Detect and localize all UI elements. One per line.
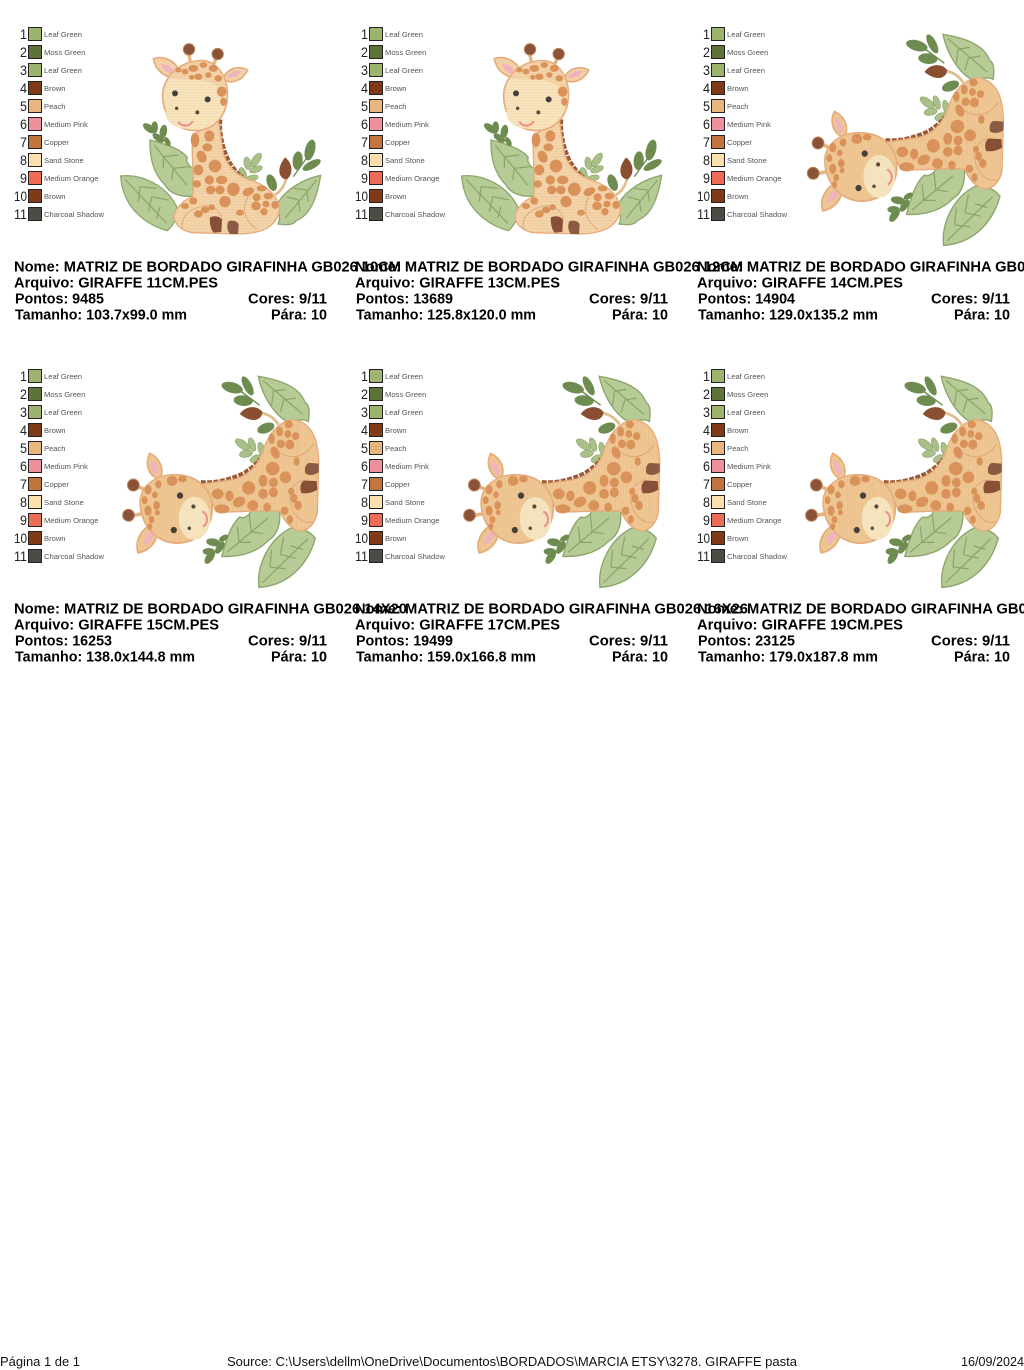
legend: thread colours: 7 xyxy=(20,134,27,150)
legend: thread colours: 2 xyxy=(703,44,710,60)
legend: thread colours: Medium Pink xyxy=(44,462,88,471)
legend: thread colours: 3 xyxy=(20,404,27,420)
illustration: rotated giraffe with leaves xyxy=(806,375,1002,587)
footer: Página 1 de 1 xyxy=(0,1355,80,1369)
text block: design details: Cores: 9/11 xyxy=(589,292,668,308)
text block: design details: Cores: 9/11 xyxy=(931,634,1010,650)
legend: thread colours: 10 xyxy=(14,188,27,204)
legend: thread colours: 1 xyxy=(703,26,710,42)
panel: giraffe design 4 xyxy=(14,368,407,666)
text block: design details: Tamanho: 179.0x187.8 mm xyxy=(698,650,878,666)
legend: thread colours: Peach xyxy=(727,102,749,111)
legend: thread colours: 5 xyxy=(361,440,368,456)
legend: thread colours: Leaf Green xyxy=(44,372,82,381)
legend: thread colours: Copper xyxy=(44,480,69,489)
text block: design details xyxy=(355,260,743,324)
text block: design details: Cores: 9/11 xyxy=(931,292,1010,308)
legend: thread colours: 6 xyxy=(20,116,27,132)
legend: thread colours: Leaf Green xyxy=(727,66,765,75)
text block: design details: Nome: MATRIZ DE BORDADO GIRAFINHA GB026 12CM xyxy=(355,260,743,276)
legend: thread colours: Sand Stone xyxy=(727,498,767,507)
legend: thread colours: 1 xyxy=(361,26,368,42)
legend: thread colours: Leaf Green xyxy=(727,408,765,417)
legend: thread colours: 11 xyxy=(14,548,27,564)
legend: thread colours: 3 xyxy=(703,62,710,78)
legend: thread colours: 8 xyxy=(361,494,368,510)
legend: thread colours: 1 xyxy=(361,368,368,384)
text block: design details: Tamanho: 138.0x144.8 mm xyxy=(15,650,195,666)
legend: thread colours: 9 xyxy=(703,512,710,528)
legend: thread colours: Leaf Green xyxy=(44,30,82,39)
legend: thread colours: Medium Orange xyxy=(385,174,439,183)
legend: thread colours: Charcoal Shadow xyxy=(727,210,787,219)
legend: thread colours xyxy=(355,26,445,222)
legend: thread colours: 10 xyxy=(355,530,368,546)
legend: thread colours: Moss Green xyxy=(727,48,768,57)
legend: thread colours: 4 xyxy=(361,80,368,96)
text block: design details: Cores: 9/11 xyxy=(248,292,327,308)
illustration: sitting giraffe with leaves xyxy=(462,44,663,234)
text block: design details xyxy=(697,260,1024,324)
legend: thread colours: 5 xyxy=(703,440,710,456)
text block: design details: Pontos: 9485 xyxy=(15,292,104,308)
legend: thread colours: Medium Pink xyxy=(385,120,429,129)
legend: thread colours: Brown xyxy=(385,84,407,93)
legend: thread colours: Leaf Green xyxy=(385,372,423,381)
legend: thread colours: 7 xyxy=(703,134,710,150)
legend: thread colours: 6 xyxy=(703,116,710,132)
legend: thread colours: 1 xyxy=(20,368,27,384)
legend: thread colours: Copper xyxy=(727,480,752,489)
legend: thread colours: 9 xyxy=(361,512,368,528)
legend: thread colours: Brown xyxy=(44,426,66,435)
legend: thread colours: Medium Orange xyxy=(727,516,781,525)
legend: thread colours: Charcoal Shadow xyxy=(385,210,445,219)
legend: thread colours: Medium Pink xyxy=(727,462,771,471)
legend: thread colours: 5 xyxy=(361,98,368,114)
legend: thread colours: 5 xyxy=(20,440,27,456)
text block: design details: Tamanho: 129.0x135.2 mm xyxy=(698,308,878,324)
legend: thread colours: Leaf Green xyxy=(385,30,423,39)
legend: thread colours: 6 xyxy=(361,458,368,474)
legend: thread colours: Sand Stone xyxy=(44,498,84,507)
legend: thread colours: Leaf Green xyxy=(727,372,765,381)
legend: thread colours: Charcoal Shadow xyxy=(44,210,104,219)
text block: design details: Arquivo: GIRAFFE 14CM.PES xyxy=(697,276,903,292)
legend: thread colours: Brown xyxy=(385,192,407,201)
footer: 16/09/2024 xyxy=(961,1355,1024,1369)
legend: thread colours: 9 xyxy=(20,512,27,528)
legend: thread colours: 10 xyxy=(14,530,27,546)
legend: thread colours xyxy=(14,368,104,564)
legend: thread colours xyxy=(697,368,787,564)
illustration: sitting giraffe with leaves xyxy=(121,44,322,234)
panel: giraffe design 3 xyxy=(697,26,1024,324)
panel: giraffe design 1 xyxy=(14,26,401,324)
text block: design details: Nome: MATRIZ DE BORDADO GIRAFINHA GB026 14X20 xyxy=(14,602,407,618)
legend: thread colours: Charcoal Shadow xyxy=(44,552,104,561)
legend: thread colours: Medium Pink xyxy=(44,120,88,129)
legend: thread colours: 11 xyxy=(697,206,710,222)
legend: thread colours: 3 xyxy=(361,62,368,78)
legend: thread colours: 2 xyxy=(703,386,710,402)
legend: thread colours: Peach xyxy=(44,102,66,111)
illustration: rotated giraffe with leaves xyxy=(464,375,660,587)
legend: thread colours: Copper xyxy=(44,138,69,147)
legend: thread colours: 8 xyxy=(20,494,27,510)
legend: thread colours: Brown xyxy=(44,84,66,93)
text block: design details: Cores: 9/11 xyxy=(589,634,668,650)
legend: thread colours: 11 xyxy=(697,548,710,564)
panel: giraffe design 6 xyxy=(697,368,1024,666)
panel: giraffe design 2 xyxy=(355,26,743,324)
legend: thread colours: Brown xyxy=(385,534,407,543)
legend: thread colours: Sand Stone xyxy=(44,156,84,165)
legend: thread colours: Medium Pink xyxy=(385,462,429,471)
legend: thread colours: 5 xyxy=(703,98,710,114)
legend: thread colours: 11 xyxy=(355,548,368,564)
text block: design details xyxy=(14,602,407,666)
text block: design details: Nome: MATRIZ DE BORDADO GIRAFINHA GB026 10CM xyxy=(14,260,401,276)
legend: thread colours: Moss Green xyxy=(385,390,426,399)
legend: thread colours: Moss Green xyxy=(385,48,426,57)
legend: thread colours: 4 xyxy=(703,80,710,96)
legend: thread colours: Sand Stone xyxy=(385,156,425,165)
legend: thread colours: 7 xyxy=(361,134,368,150)
legend: thread colours: Brown xyxy=(727,534,749,543)
legend: thread colours: 3 xyxy=(20,62,27,78)
legend: thread colours: 10 xyxy=(697,530,710,546)
legend: thread colours: 8 xyxy=(703,152,710,168)
legend: thread colours: 6 xyxy=(20,458,27,474)
legend: thread colours: Brown xyxy=(727,192,749,201)
legend: thread colours: 4 xyxy=(20,80,27,96)
illustration: rotated giraffe with leaves xyxy=(807,33,1003,245)
illustration: rotated giraffe with leaves xyxy=(123,375,319,587)
legend: thread colours: 2 xyxy=(361,44,368,60)
legend: thread colours: 2 xyxy=(361,386,368,402)
legend: thread colours: Brown xyxy=(385,426,407,435)
legend: thread colours xyxy=(14,26,104,222)
legend: thread colours: Leaf Green xyxy=(44,408,82,417)
legend: thread colours: Peach xyxy=(44,444,66,453)
text block: design details: Pontos: 14904 xyxy=(698,292,795,308)
legend: thread colours: 8 xyxy=(361,152,368,168)
legend: thread colours: 1 xyxy=(20,26,27,42)
legend: thread colours: Copper xyxy=(385,480,410,489)
text block: design details: Arquivo: GIRAFFE 17CM.PES xyxy=(355,618,560,634)
text block: design details: Pontos: 16253 xyxy=(15,634,112,650)
legend: thread colours: 4 xyxy=(361,422,368,438)
legend: thread colours xyxy=(697,26,787,222)
legend: thread colours: Copper xyxy=(727,138,752,147)
legend: thread colours xyxy=(355,368,445,564)
legend: thread colours: Medium Orange xyxy=(385,516,439,525)
legend: thread colours: 7 xyxy=(20,476,27,492)
legend: thread colours: Charcoal Shadow xyxy=(385,552,445,561)
legend: thread colours: 9 xyxy=(20,170,27,186)
legend: thread colours: 1 xyxy=(703,368,710,384)
text block: design details: Pontos: 13689 xyxy=(356,292,453,308)
text block: design details: Tamanho: 103.7x99.0 mm xyxy=(15,308,187,324)
legend: thread colours: 3 xyxy=(703,404,710,420)
legend: thread colours: 4 xyxy=(703,422,710,438)
legend: thread colours: 6 xyxy=(361,116,368,132)
legend: thread colours: Medium Orange xyxy=(44,174,98,183)
legend: thread colours: 9 xyxy=(361,170,368,186)
text block: design details xyxy=(14,260,401,324)
legend: thread colours: 8 xyxy=(703,494,710,510)
text block: design details: Pontos: 23125 xyxy=(698,634,795,650)
legend: thread colours: 2 xyxy=(20,44,27,60)
legend: thread colours: 5 xyxy=(20,98,27,114)
text block: design details: Pontos: 19499 xyxy=(356,634,453,650)
legend: thread colours: Moss Green xyxy=(727,390,768,399)
legend: thread colours: 8 xyxy=(20,152,27,168)
legend: thread colours: 6 xyxy=(703,458,710,474)
text block: design details: Cores: 9/11 xyxy=(248,634,327,650)
footer: Source: C:\Users\dellm\OneDrive\Documentos\BORDADOS\MARCIA ETSY\3278. GIRAFFE pasta xyxy=(227,1355,797,1369)
legend: thread colours: Moss Green xyxy=(44,48,85,57)
legend: thread colours: 9 xyxy=(703,170,710,186)
text block: design details: Pára: 10 xyxy=(271,308,327,324)
legend: thread colours: 2 xyxy=(20,386,27,402)
legend: thread colours: Moss Green xyxy=(44,390,85,399)
text block: design details: Pára: 10 xyxy=(271,650,327,666)
legend: thread colours: Peach xyxy=(727,444,749,453)
legend: thread colours: Brown xyxy=(727,426,749,435)
legend: thread colours: 11 xyxy=(355,206,368,222)
legend: thread colours: Medium Orange xyxy=(727,174,781,183)
legend: thread colours: Leaf Green xyxy=(385,66,423,75)
legend: thread colours: Brown xyxy=(44,192,66,201)
legend: thread colours: Leaf Green xyxy=(385,408,423,417)
legend: thread colours: 10 xyxy=(355,188,368,204)
legend: thread colours: 10 xyxy=(697,188,710,204)
legend: thread colours: Leaf Green xyxy=(44,66,82,75)
text block: design details: Nome: MATRIZ DE BORDADO GIRAFINHA GB026 16X26 xyxy=(355,602,748,618)
text block: design details: Pára: 10 xyxy=(954,650,1010,666)
legend: thread colours: Copper xyxy=(385,138,410,147)
text block: design details: Tamanho: 159.0x166.8 mm xyxy=(356,650,536,666)
legend: thread colours: 4 xyxy=(20,422,27,438)
legend: thread colours: Medium Orange xyxy=(44,516,98,525)
legend: thread colours: Brown xyxy=(44,534,66,543)
text block: design details xyxy=(355,602,748,666)
legend: thread colours: Peach xyxy=(385,102,407,111)
text block: design details: Arquivo: GIRAFFE 13CM.PES xyxy=(355,276,560,292)
text block: design details: Pára: 10 xyxy=(612,308,668,324)
legend: thread colours: Leaf Green xyxy=(727,30,765,39)
text block: design details: Pára: 10 xyxy=(612,650,668,666)
text block: design details: Tamanho: 125.8x120.0 mm xyxy=(356,308,536,324)
legend: thread colours: Charcoal Shadow xyxy=(727,552,787,561)
panel: giraffe design 5 xyxy=(355,368,748,666)
legend: thread colours: Medium Pink xyxy=(727,120,771,129)
text block: design details: Arquivo: GIRAFFE 19CM.PES xyxy=(697,618,903,634)
text block: design details: Arquivo: GIRAFFE 11CM.PES xyxy=(14,276,218,292)
legend: thread colours: Sand Stone xyxy=(385,498,425,507)
legend: thread colours: 7 xyxy=(703,476,710,492)
legend: thread colours: Sand Stone xyxy=(727,156,767,165)
legend: thread colours: 7 xyxy=(361,476,368,492)
legend: thread colours: Brown xyxy=(727,84,749,93)
text block: design details: Arquivo: GIRAFFE 15CM.PES xyxy=(14,618,219,634)
legend: thread colours: Peach xyxy=(385,444,407,453)
text block: design details xyxy=(697,602,1024,666)
text block: design details: Pára: 10 xyxy=(954,308,1010,324)
legend: thread colours: 3 xyxy=(361,404,368,420)
footer xyxy=(0,1355,1024,1369)
legend: thread colours: 11 xyxy=(14,206,27,222)
